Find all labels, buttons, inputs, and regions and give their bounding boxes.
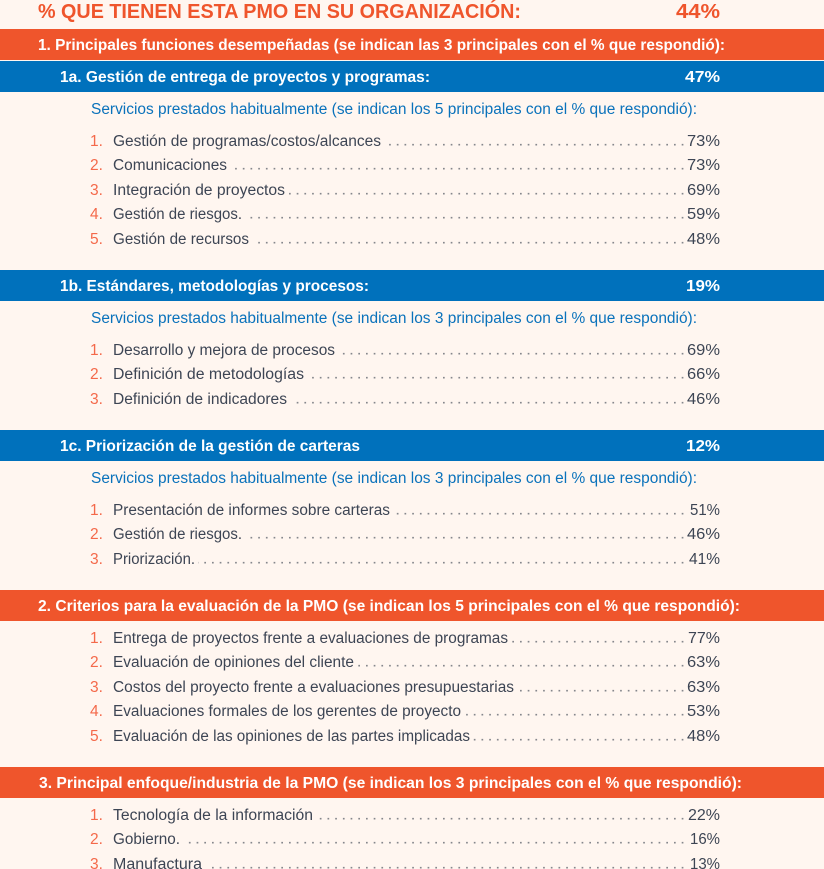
list 1b: 66% bbox=[687, 366, 720, 383]
subsection header 1b bbox=[0, 270, 824, 301]
list 1a: 5. bbox=[90, 231, 103, 248]
list 1c: 46% bbox=[687, 526, 720, 543]
list 3 bbox=[90, 807, 720, 869]
list 1a: Gestión de riesgos. bbox=[113, 206, 242, 223]
list 1a: 2. bbox=[90, 157, 103, 174]
subsection header 1a: 47% bbox=[685, 69, 720, 86]
list 2: 48% bbox=[687, 728, 720, 745]
section header 1: 1. Principales funciones desempeñadas (se indican las 3 principales con el % que respondió): bbox=[38, 37, 725, 54]
list 1b: Definición de metodologías bbox=[113, 366, 304, 383]
list 1c: 3. bbox=[90, 551, 103, 568]
list 2 bbox=[90, 630, 720, 745]
list 1a: Integración de proyectos bbox=[113, 182, 285, 199]
section header 2 bbox=[0, 590, 824, 621]
list 1b bbox=[90, 342, 720, 408]
list 1c: Presentación de informes sobre carteras bbox=[113, 502, 390, 519]
subsection header 1a: 1a. Gestión de entrega de proyectos y programas: bbox=[60, 69, 430, 86]
list 3: Gobierno. bbox=[113, 831, 180, 848]
subsection header 1c bbox=[0, 430, 824, 461]
list 1a: 3. bbox=[90, 182, 103, 199]
list 3: 16% bbox=[690, 831, 720, 848]
section header 3 bbox=[0, 767, 824, 798]
list 1b: Definición de indicadores bbox=[113, 391, 287, 408]
list 2: 77% bbox=[688, 630, 720, 647]
subsection header 1a bbox=[0, 61, 824, 92]
list 2: Evaluación de opiniones del cliente bbox=[113, 654, 354, 671]
subheading 1b services: Servicios prestados habitualmente (se indican los 3 principales con el % que respondió): bbox=[91, 310, 697, 327]
title: share with this PMO bbox=[38, 0, 720, 23]
list 1a: Gestión de recursos bbox=[113, 231, 249, 248]
list 1b: 46% bbox=[687, 391, 720, 408]
list 3: 2. bbox=[90, 831, 103, 848]
list 1c: Gestión de riesgos. bbox=[113, 526, 242, 543]
list 1a: 48% bbox=[687, 231, 720, 248]
section header 2: 2. Criterios para la evaluación de la PMO (se indican los 5 principales con el % que respondió): bbox=[38, 598, 740, 615]
list 1c bbox=[90, 502, 720, 568]
list 1c: 1. bbox=[90, 502, 103, 519]
list 1a: Gestión de programas/costos/alcances bbox=[113, 133, 381, 150]
list 1a: 73% bbox=[687, 133, 720, 150]
list 1b: Desarrollo y mejora de procesos bbox=[113, 342, 335, 359]
list 1c: 51% bbox=[690, 502, 720, 519]
list 3: 22% bbox=[688, 807, 720, 824]
subsection header 1b: 19% bbox=[686, 278, 720, 295]
list 1a: 1. bbox=[90, 133, 103, 150]
list 1a bbox=[90, 133, 720, 248]
subheading 1c services: Servicios prestados habitualmente (se indican los 3 principales con el % que respondió): bbox=[91, 470, 697, 487]
list 2: 63% bbox=[687, 679, 720, 696]
list 2: 1. bbox=[90, 630, 103, 647]
section header 1 bbox=[0, 29, 824, 60]
list 1c: 2. bbox=[90, 526, 103, 543]
list 2: 53% bbox=[687, 703, 720, 720]
title: share with this PMO: % QUE TIENEN ESTA PMO EN SU ORGANIZACIÓN: bbox=[38, 0, 521, 23]
list 3: Tecnología de la información bbox=[113, 807, 313, 824]
list 2: Entrega de proyectos frente a evaluaciones de programas bbox=[113, 630, 508, 647]
list 2: Evaluaciones formales de los gerentes de proyecto bbox=[113, 703, 461, 720]
list 2: 2. bbox=[90, 654, 103, 671]
section header 3: 3. Principal enfoque/industria de la PMO (se indican los 3 principales con el % que respondió): bbox=[39, 775, 742, 792]
list 2: Costos del proyecto frente a evaluaciones presupuestarias bbox=[113, 679, 514, 696]
list 1b: 2. bbox=[90, 366, 103, 383]
subsection header 1c: 12% bbox=[686, 438, 720, 455]
list 1b: 3. bbox=[90, 391, 103, 408]
list 3: 1. bbox=[90, 807, 103, 824]
list 1c: 41% bbox=[689, 551, 720, 568]
list 1c: Priorización. bbox=[113, 551, 195, 568]
list 1a: 73% bbox=[687, 157, 720, 174]
list 1b: 1. bbox=[90, 342, 103, 359]
list 1a: 4. bbox=[90, 206, 103, 223]
list 2: 4. bbox=[90, 703, 103, 720]
subsection header 1c: 1c. Priorización de la gestión de carteras bbox=[60, 438, 360, 455]
list 1a: 59% bbox=[687, 206, 720, 223]
title: share with this PMO: 44% bbox=[676, 1, 720, 23]
list 1a: 69% bbox=[687, 182, 720, 199]
subsection header 1b: 1b. Estándares, metodologías y procesos: bbox=[60, 278, 369, 295]
list 1b: 69% bbox=[687, 342, 720, 359]
list 2: 5. bbox=[90, 728, 103, 745]
subheading 1a services: Servicios prestados habitualmente (se indican los 5 principales con el % que respondió): bbox=[91, 101, 697, 118]
list 1a: Comunicaciones bbox=[113, 157, 227, 174]
list 2: 3. bbox=[90, 679, 103, 696]
list 2: Evaluación de las opiniones de las partes implicadas bbox=[113, 728, 470, 745]
list 2: 63% bbox=[687, 654, 720, 671]
